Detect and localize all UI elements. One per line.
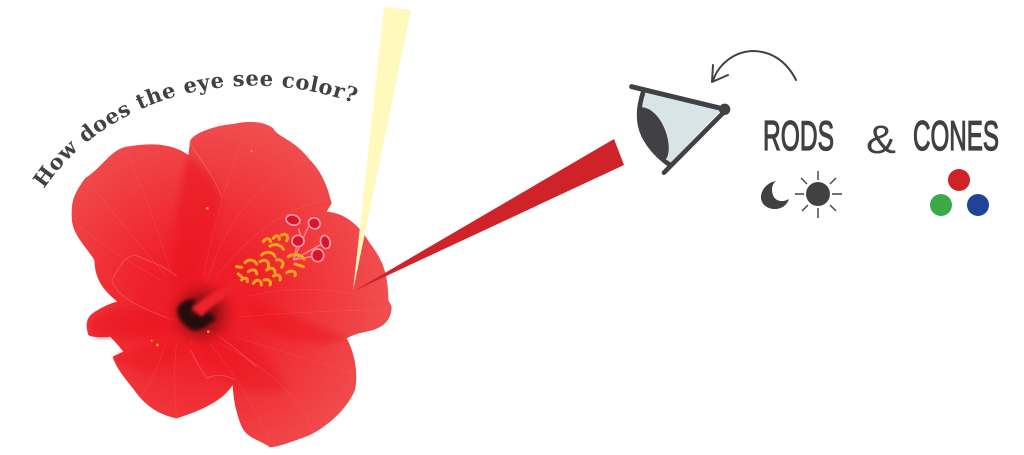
light beam: yellow incoming xyxy=(353,7,411,291)
stigma stalks xyxy=(293,227,325,260)
label: rods: RODS xyxy=(763,112,834,159)
light beam: red reflected xyxy=(354,139,624,291)
flower: red hibiscus xyxy=(72,122,392,447)
flower silhouette xyxy=(72,122,392,447)
green dot xyxy=(930,194,952,216)
icon: moon xyxy=(761,181,789,209)
petal veins xyxy=(77,130,387,443)
stigma rings xyxy=(285,213,332,262)
ampersand: & xyxy=(866,118,896,162)
eye iris xyxy=(637,107,669,161)
pollen specks xyxy=(151,150,253,346)
arrow: curved toward eye xyxy=(712,51,796,82)
lower eyelid line xyxy=(664,110,726,173)
petal shading xyxy=(88,157,347,392)
upper eyelid line xyxy=(632,87,725,109)
flower style xyxy=(192,268,270,317)
flower centre xyxy=(160,278,247,345)
icon: sun xyxy=(795,171,842,218)
icon: cone colours xyxy=(930,169,989,216)
icon: eye xyxy=(632,87,730,173)
stamens xyxy=(237,234,304,285)
eye white xyxy=(640,92,722,163)
petal fold highlights xyxy=(112,142,257,380)
blue dot xyxy=(967,194,989,216)
red dot xyxy=(948,169,970,191)
heading: curved question: How does the eye see color? xyxy=(32,74,358,188)
eyelid back curve xyxy=(639,92,670,165)
